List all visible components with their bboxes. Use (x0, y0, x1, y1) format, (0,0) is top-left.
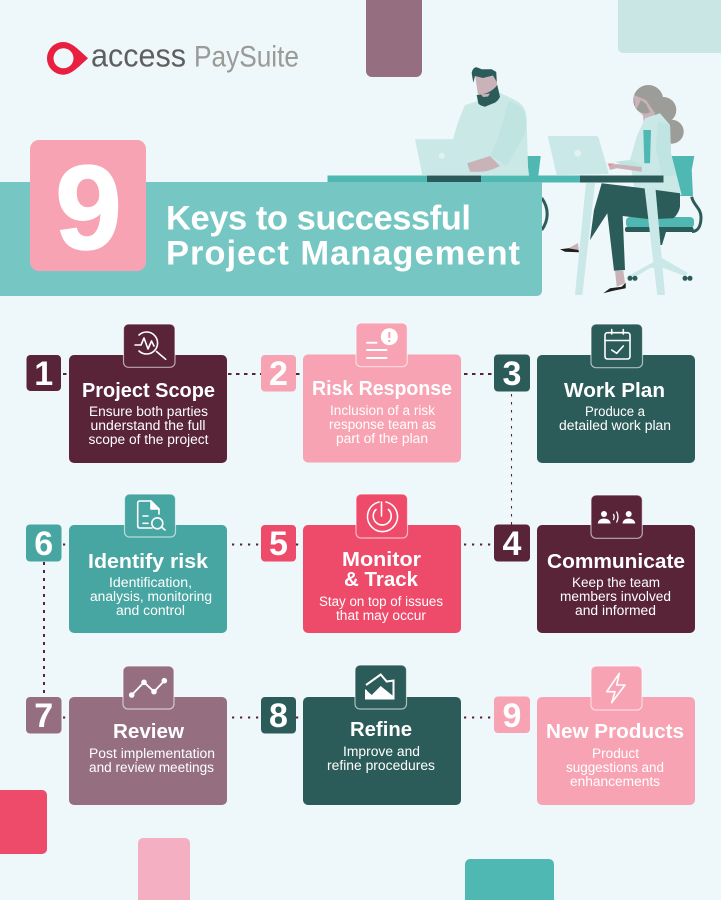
step 2: Risk Response: response team as (329, 417, 436, 432)
big number box: 9 (55, 141, 122, 275)
step 6: Identify risk: 6 (34, 525, 53, 563)
step 4: Communicate (494, 495, 695, 633)
step 6: Identify risk: Identify risk (88, 551, 209, 573)
step 5: Monitor & Track: Monitor (342, 549, 421, 571)
decorative block: left red (0, 790, 47, 854)
logo: Access PaySuite: PaySuite (194, 40, 299, 74)
step 3: Work Plan (494, 324, 695, 463)
icon: two people talking (598, 511, 635, 524)
step 7: Review: and review meetings (89, 760, 214, 775)
decorative block: top mauve (366, 0, 422, 77)
woman's laptop (548, 136, 608, 175)
woman (607, 85, 684, 195)
step 8: Refine: Improve and (343, 744, 420, 759)
step 3: Work Plan: Work Plan (564, 380, 665, 402)
big number box (30, 140, 146, 275)
step 1: Project Scope: Ensure both parties (89, 404, 208, 419)
step 1: Project Scope: 1 (34, 355, 53, 393)
step 7: Review: Post implementation (89, 746, 215, 761)
icon: mountain landscape (365, 674, 394, 700)
man's laptop (415, 139, 470, 175)
logo: Access PaySuite (47, 38, 299, 75)
step 7: Review (26, 666, 227, 805)
decorative block: bottom pink (138, 838, 190, 900)
step 2: Risk Response: 2 (269, 355, 288, 393)
decorative block: bottom teal (465, 859, 554, 900)
title: Keys to successful (166, 200, 471, 238)
woman's chair (625, 156, 701, 281)
icon: magnifier with pulse (135, 332, 166, 359)
step 4: Communicate: 4 (503, 525, 522, 563)
step 8: Refine (261, 665, 461, 805)
step 2: Risk Response: Inclusion of a risk (330, 403, 435, 418)
illustration: two people working at a desk (328, 67, 701, 295)
step 8: Refine: Refine (350, 719, 412, 741)
step 2: Risk Response: Risk Response (312, 378, 452, 400)
step 7: Review: 7 (34, 697, 53, 735)
step 4: Communicate: Communicate (547, 551, 685, 573)
woman's back foot (560, 243, 579, 252)
step 2: Risk Response (261, 323, 461, 462)
step 6: Identify risk: Identification, (109, 575, 192, 590)
icon: radar dial (368, 502, 398, 532)
step 8: Refine: refine procedures (327, 758, 435, 773)
step 7: Review: Review (113, 721, 184, 743)
banner (0, 182, 542, 296)
desk legs (575, 183, 665, 295)
step 9: New Products: Product (592, 746, 639, 761)
step 9: New Products: enhancements (570, 774, 660, 789)
step 6: Identify risk: analysis, monitoring (90, 589, 212, 604)
step 3: Work Plan: 3 (503, 355, 521, 393)
icon: line chart (129, 678, 167, 698)
man (453, 67, 528, 175)
step 4: Communicate: members involved (560, 589, 671, 604)
step 6: Identify risk (26, 494, 227, 633)
step 9: New Products: suggestions and (566, 760, 664, 775)
man's chair (527, 156, 547, 230)
step 5: Monitor & Track: & Track (344, 569, 419, 591)
step 1: Project Scope (26, 324, 227, 463)
step 2: Risk Response: part of the plan (336, 431, 428, 446)
step 3: Work Plan: detailed work plan (559, 418, 671, 433)
step 1: Project Scope: Project Scope (82, 380, 215, 402)
step 3: Work Plan: Produce a (585, 404, 645, 419)
step 5: Monitor & Track: that may occur (336, 608, 426, 623)
step 5: Monitor & Track: 5 (269, 525, 288, 563)
icon: lightning bolt (607, 673, 625, 703)
step 4: Communicate: Keep the team (572, 575, 660, 590)
step 9: New Products: 9 (503, 697, 521, 735)
step 5: Monitor & Track (261, 494, 461, 633)
desk top (328, 176, 664, 182)
woman's trousers and shoe (590, 183, 680, 293)
icon: document with alert (367, 343, 386, 358)
step 9: New Products: New Products (546, 721, 684, 743)
step 9: New Products (494, 666, 695, 805)
icon: document with magnifier (138, 501, 165, 530)
decorative block: top right (618, 0, 721, 53)
step 5: Monitor & Track: Stay on top of issues (319, 594, 443, 609)
step 4: Communicate: and informed (575, 603, 656, 618)
step 6: Identify risk: and control (116, 603, 185, 618)
title (166, 200, 520, 272)
icon: calendar (605, 330, 630, 359)
title: Project Management (166, 234, 520, 272)
step 1: Project Scope: understand the full (90, 418, 206, 433)
logo: Access PaySuite: access (91, 38, 186, 74)
connectors: dotted path (44, 374, 512, 718)
step 1: Project Scope: scope of the project (88, 432, 209, 447)
step 8: Refine: 8 (269, 697, 288, 735)
